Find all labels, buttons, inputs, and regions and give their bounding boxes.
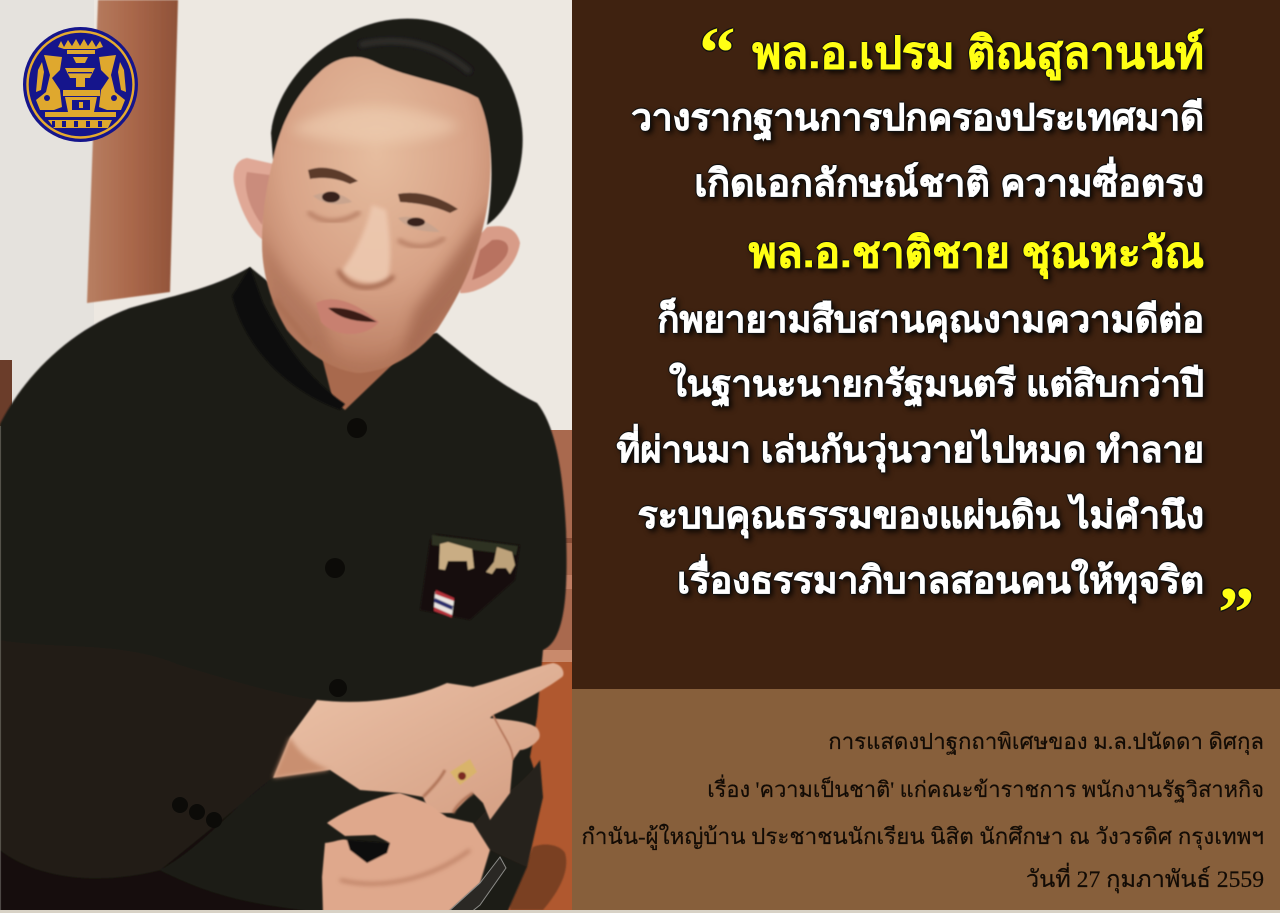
panel: source caption (572, 689, 1280, 910)
caption line 3: กำนัน-ผู้ใหญ่บ้าน ประชาชนนักเรียน นิสิต นักศึกษา ณ วังวรดิศ กรุงเทพฯ (581, 824, 1264, 849)
jacket (0, 267, 567, 913)
quote line 6: ในฐานะนายกรัฐมนตรี แต่สิบกว่าปี (669, 363, 1204, 404)
closing quote mark: ” (1218, 572, 1254, 653)
opening quote mark: “ (699, 12, 736, 93)
right ear (460, 226, 520, 293)
collar (232, 267, 345, 410)
watch (447, 857, 506, 913)
chair arm (510, 845, 566, 910)
sleeve (0, 640, 317, 878)
head (234, 19, 523, 380)
wooden pillar (87, 0, 178, 303)
face shading (258, 107, 495, 380)
quote line 1 name: พล.อ.เปรม ติณสูลานนท์ (752, 29, 1204, 78)
quote line 5: ก็พยายามสืบสานคุณงามความดีต่อ (657, 299, 1204, 340)
photo: portrait of the speaker (0, 0, 572, 910)
quote line 7: ที่ผ่านมา เล่นกันวุ่นวายไปหมด ทำลาย (617, 429, 1204, 470)
left ear (234, 158, 278, 240)
caption line 1: การแสดงปาฐกถาพิเศษของ ม.ล.ปนัดดา ดิศกุล (828, 729, 1264, 754)
wood panel lower right (500, 430, 572, 913)
pointing hand (273, 663, 563, 820)
face (262, 57, 490, 373)
emblem (23, 27, 138, 142)
brows, eyes, nose, mouth (308, 168, 358, 184)
quote line 3: เกิดเอกลักษณ์ชาติ ความซื่อตรง (694, 162, 1204, 204)
quote line 9: เรื่องธรรมาภิบาลสอนคนให้ทุจริต (677, 559, 1204, 601)
buttons (172, 418, 367, 828)
ring (450, 759, 477, 785)
pocket with elephants and flag (420, 534, 520, 620)
caption date: วันที่ 27 กุมภาพันธ์ 2559 (1026, 867, 1264, 893)
hair (271, 19, 523, 225)
wall background (0, 0, 572, 913)
quote line 2: วางรากฐานการปกครองประเทศมาดี (631, 97, 1204, 138)
lower hand (322, 793, 490, 913)
caption line 2: เรื่อง 'ความเป็นชาติ' แก่คณะข้าราชการ พนักงานรัฐวิสาหกิจ (707, 778, 1264, 802)
quote line 8: ระบบคุณธรรมของแผ่นดิน ไม่คำนึง (638, 494, 1204, 536)
neck (320, 345, 400, 410)
panel: quote (572, 0, 1280, 689)
quote line 4 name: พล.อ.ชาติชาย ชุณหะวัณ (749, 230, 1204, 277)
